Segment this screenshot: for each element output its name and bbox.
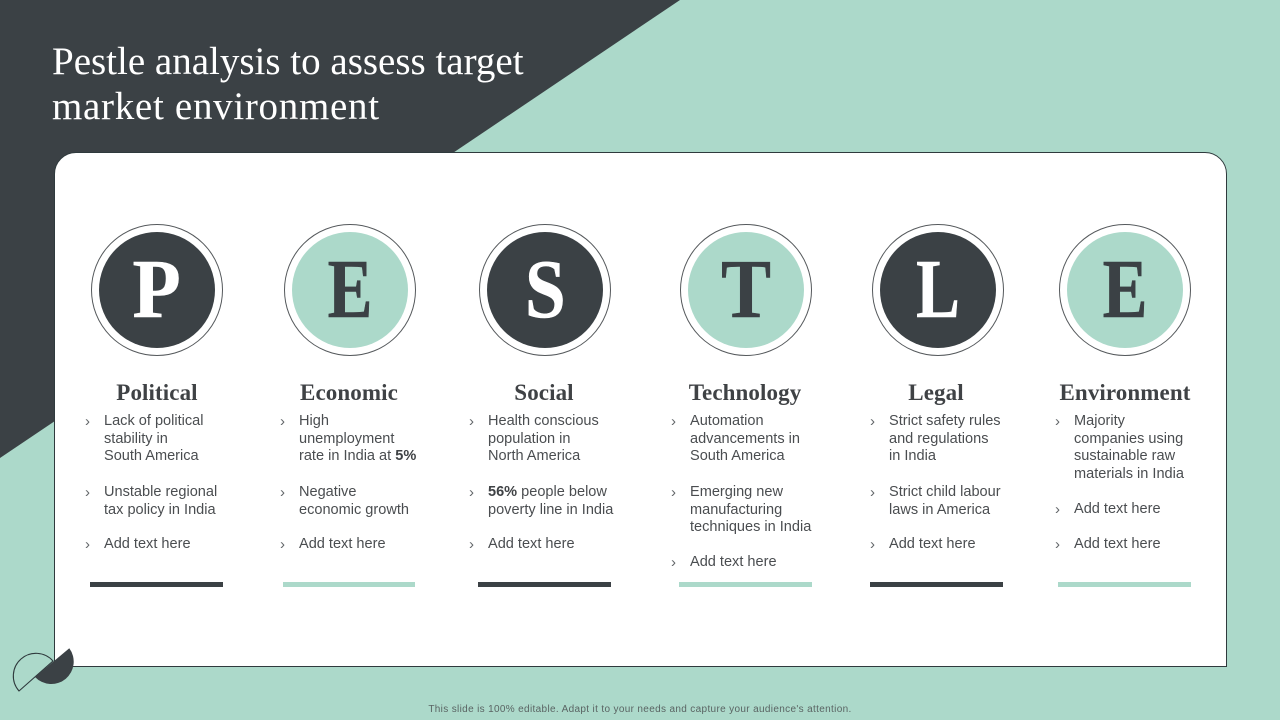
panel: Political: South America [104, 448, 199, 464]
panel: Political [85, 224, 223, 587]
panel: Social: population in [488, 430, 571, 446]
panel: Environment: materials in India [1074, 466, 1184, 482]
panel: Environment: companies using [1074, 430, 1183, 446]
panel: Economic: rate in India at 5% [299, 448, 416, 464]
icon: letter T [680, 224, 812, 356]
icon: letter E: E [328, 243, 372, 336]
panel: Political: Unstable regional [104, 484, 217, 500]
panel: Technology: Add text here [690, 554, 777, 570]
heading: Political: Political [116, 380, 198, 405]
panel: Legal: › [870, 484, 875, 501]
icon: letter T: T [721, 243, 771, 336]
panel: Technology: › [671, 484, 676, 501]
panel: Legal: and regulations [889, 430, 988, 446]
panel: Social: Health conscious [488, 413, 599, 429]
bullet list: Social [469, 413, 614, 553]
heading: Social: Social [514, 380, 574, 405]
panel: Political: › [85, 413, 90, 430]
panel: Political: › [85, 536, 90, 553]
panel: Legal: › [870, 536, 875, 553]
panel: Political: Lack of political [104, 413, 203, 429]
title: Pestle analysis to assess target [52, 40, 524, 83]
panel: Political: stability in [104, 430, 168, 446]
panel: Political: tax policy in India [104, 502, 216, 518]
heading: Technology: Technology [689, 380, 801, 405]
bullet list: Economic [280, 413, 416, 553]
heading: Economic: Economic [300, 380, 398, 405]
panel: Environment: › [1055, 536, 1060, 553]
panel: Technology: Automation [690, 413, 764, 429]
panel: Environment: sustainable raw [1074, 448, 1175, 464]
panel: Economic: › [280, 413, 285, 430]
heading: Environment: Environment [1059, 380, 1191, 405]
panel: Technology: Emerging new [690, 484, 783, 500]
icon: letter L [872, 224, 1004, 356]
panel: Environment: › [1055, 413, 1060, 430]
panel: Technology: › [671, 413, 676, 430]
panel: Political: › [85, 484, 90, 501]
panel: Economic: economic growth [299, 502, 409, 518]
panel: Economic: High [299, 413, 329, 429]
bar: Legal [870, 582, 1003, 587]
panel: Environment: Majority [1074, 413, 1125, 429]
panel: Environment: › [1055, 501, 1060, 518]
panel: Technology: techniques in India [690, 519, 811, 535]
title: market environment [52, 85, 380, 128]
panel: Social: poverty line in India [488, 502, 613, 518]
icon: letter S: S [525, 243, 565, 336]
icon: split circle logo [12, 648, 74, 692]
icon: letter E: E [1103, 243, 1147, 336]
icon: letter E [284, 224, 416, 356]
icon: letter E [1059, 224, 1191, 356]
panel: Legal: Strict safety rules [889, 413, 1001, 429]
panel: Economic: › [280, 536, 285, 553]
panel: Legal [870, 224, 1004, 587]
panel: Social [469, 224, 614, 587]
panel: Economic [280, 224, 416, 587]
panel: Legal: Strict child labour [889, 484, 1001, 500]
panel: Economic: Add text here [299, 536, 386, 552]
panel: Legal: › [870, 413, 875, 430]
heading: Legal: Legal [908, 380, 964, 405]
panel: Legal: Add text here [889, 536, 976, 552]
panel: Economic: › [280, 484, 285, 501]
icon: letter L: L [916, 243, 960, 336]
panel: Social: › [469, 413, 474, 430]
title [52, 40, 524, 128]
bar: Social [478, 582, 611, 587]
panel: Environment: Add text here [1074, 536, 1161, 552]
panel: Social: North America [488, 448, 580, 464]
bar: Political [90, 582, 223, 587]
panel: Legal: laws in America [889, 502, 990, 518]
bullet list: Political [85, 413, 217, 553]
panel: Technology: advancements in [690, 430, 800, 446]
panel: Social: Add text here [488, 536, 575, 552]
panel: Political: Add text here [104, 536, 191, 552]
panel: white card [54, 152, 1227, 667]
icon: letter P: P [133, 243, 181, 336]
bar: Environment [1058, 582, 1191, 587]
bullet list: Legal [870, 413, 1001, 553]
icon: letter S [479, 224, 611, 356]
bullet list: Environment [1055, 413, 1184, 553]
panel: Technology: manufacturing [690, 502, 782, 518]
icon: letter P [91, 224, 223, 356]
panel: Technology: › [671, 554, 676, 571]
panel: Economic: unemployment [299, 430, 394, 446]
panel: Environment [1055, 224, 1191, 587]
bullet list: Technology [671, 413, 812, 571]
panel: Technology [671, 224, 812, 587]
panel: Legal: in India [889, 448, 936, 464]
bar: Economic [283, 582, 415, 587]
bar: Technology [679, 582, 812, 587]
panel: Social: › [469, 484, 474, 501]
panel: Economic: Negative [299, 484, 356, 500]
panel: Social: 56% people below [488, 484, 607, 500]
footer note: This slide is 100% editable. Adapt it to your needs and capture your audience's attention. [428, 704, 852, 715]
panel: Technology: South America [690, 448, 785, 464]
panel: Social: › [469, 536, 474, 553]
panel: Environment: Add text here [1074, 501, 1161, 517]
